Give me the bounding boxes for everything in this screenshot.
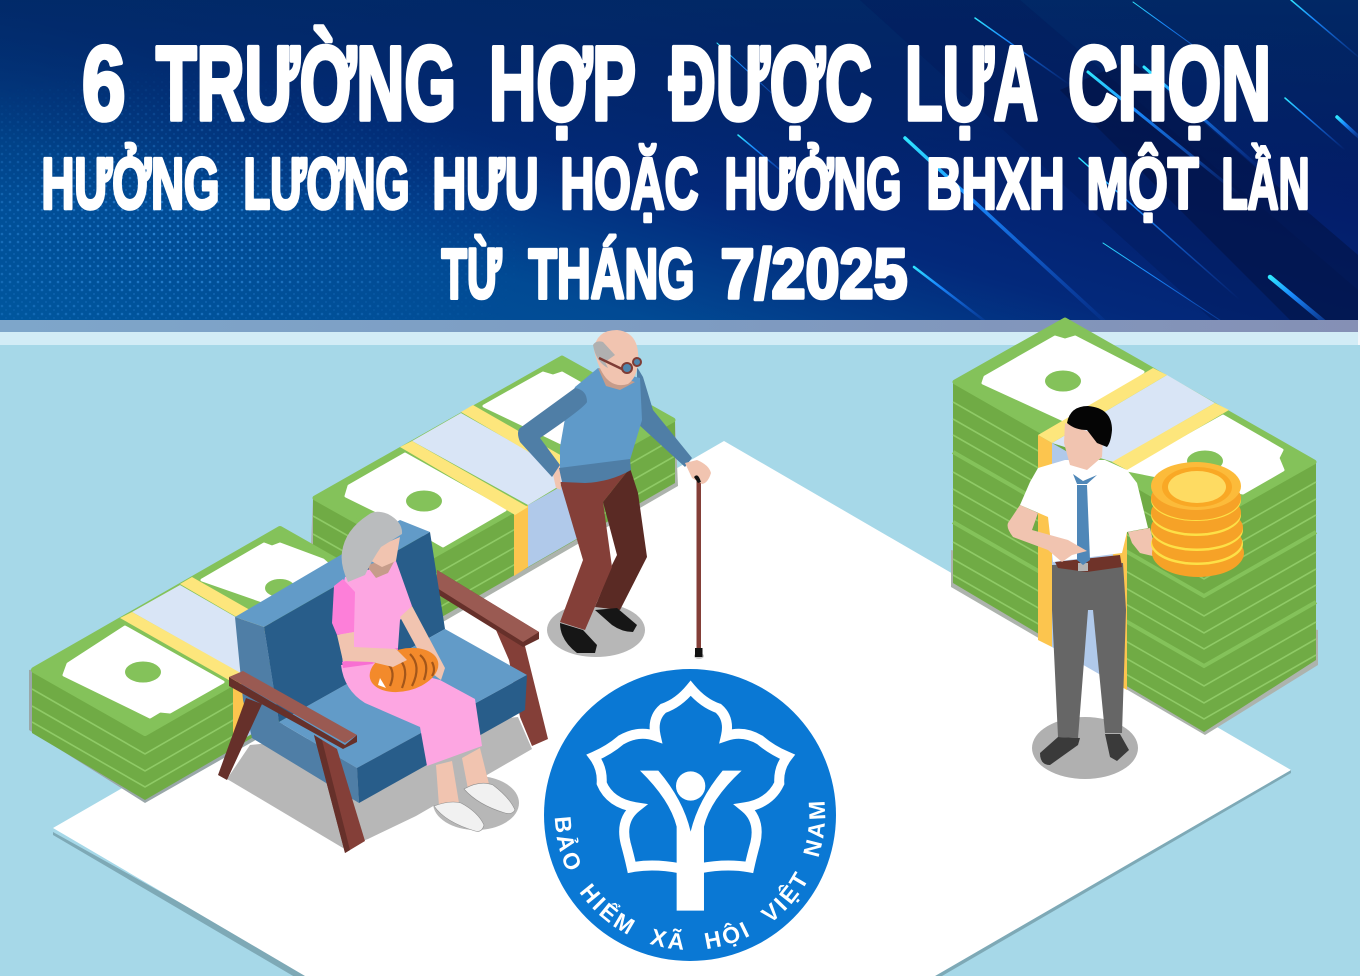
social insurance logo (544, 669, 836, 961)
title line 1: TRƯỜNG (156, 26, 456, 142)
person head (676, 771, 705, 801)
chair floor shadow (227, 717, 532, 848)
face (1064, 423, 1103, 470)
far arm (1128, 528, 1157, 557)
legs (436, 748, 489, 806)
head (594, 330, 638, 385)
far armrest (437, 570, 539, 647)
title line 1: HỢP (489, 26, 636, 142)
right edge strip (1358, 0, 1360, 345)
neck (366, 558, 396, 578)
title line 3: TỪ (442, 234, 502, 313)
hair (1067, 406, 1112, 447)
title line 2: HƯU (432, 144, 538, 224)
rear shoe (595, 608, 637, 632)
seat front (357, 675, 527, 803)
neck (598, 368, 635, 390)
side hair (593, 341, 615, 368)
translucent header band (0, 320, 1358, 332)
belt (342, 648, 398, 668)
front shoe (560, 623, 597, 653)
title (42, 26, 1310, 313)
logo disc (544, 669, 836, 961)
cat in lap (365, 641, 443, 699)
seat top (279, 629, 527, 768)
far armrest back leg (496, 630, 548, 746)
far arm (637, 367, 692, 467)
pointing arm (1008, 505, 1087, 562)
armchair (218, 520, 548, 853)
far arm (400, 606, 445, 680)
title line 1: 6 (82, 26, 126, 142)
chair side (235, 617, 359, 803)
hand on cane (685, 460, 711, 484)
glasses (599, 358, 641, 373)
rear trouser leg (595, 468, 647, 610)
near armrest (229, 671, 357, 749)
flower outline (594, 688, 787, 911)
near arm (337, 632, 407, 667)
cane handle (694, 475, 701, 483)
slippers (434, 783, 515, 831)
title line 1: LỰA (905, 26, 1038, 142)
front trouser leg (560, 468, 630, 630)
white floor (53, 441, 1291, 976)
title line 2: HOẶC (560, 144, 698, 224)
backrest front (264, 532, 445, 722)
torso (338, 561, 412, 665)
elderly woman (332, 512, 519, 831)
logo circular text: BẢO HIỂM XÃ HỘI VIỆT NAM (554, 802, 826, 950)
sleeve (332, 579, 355, 635)
near arm (518, 388, 587, 477)
title line 3 (442, 234, 908, 313)
title line 2: HƯỞNG (724, 144, 902, 224)
cane (694, 480, 704, 659)
sweater (560, 368, 642, 472)
title line 2: BHXH (926, 144, 1064, 224)
title line 2 (42, 144, 1310, 224)
title line 2: HƯỞNG (42, 144, 220, 224)
left money stack (29, 529, 396, 803)
sweater hem (559, 459, 631, 483)
man holding coins (1008, 406, 1244, 779)
shoes (1040, 734, 1129, 765)
foot shadow (433, 776, 519, 830)
elderly man with cane (518, 330, 711, 659)
title line 1: ĐƯỢC (669, 26, 872, 142)
buckle (1078, 563, 1088, 571)
foot shadow (1032, 717, 1138, 779)
coin stack (1151, 462, 1244, 577)
dress skirt (341, 662, 482, 766)
near armrest back leg (218, 698, 262, 780)
backrest top (235, 520, 430, 627)
belt (1055, 555, 1122, 572)
trousers (1052, 563, 1126, 738)
tie (1077, 485, 1090, 565)
title line 2: LƯƠNG (244, 144, 410, 224)
person symbol (640, 771, 742, 911)
light band (0, 332, 1358, 345)
collar knot (1073, 474, 1097, 484)
title line 3: THÁNG (528, 234, 694, 313)
shirt (1020, 460, 1148, 562)
hidden hand (552, 465, 561, 490)
right money stack (951, 320, 1318, 735)
face (371, 537, 400, 567)
title line 3: 7/2025 (720, 234, 908, 313)
foot shadow (547, 603, 645, 657)
title line 2: MỘT (1086, 144, 1199, 224)
near armrest front leg (314, 735, 365, 853)
title line 1 (82, 26, 1271, 142)
hair (342, 512, 402, 582)
middle money stack (310, 356, 678, 630)
header banner (0, 0, 1360, 345)
